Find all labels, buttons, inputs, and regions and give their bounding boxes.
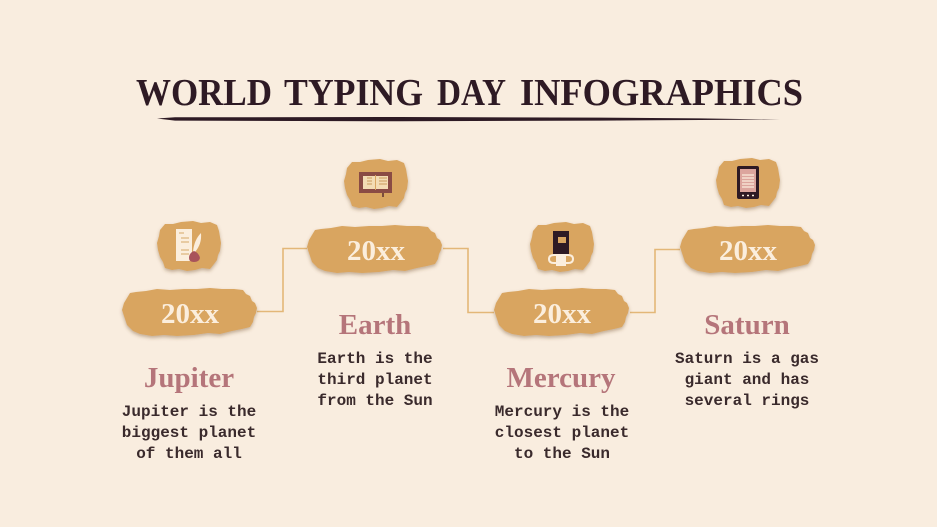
panel: Mercury	[494, 222, 629, 463]
icon: scroll, quill and inkwell	[157, 221, 221, 271]
year label: 20xx	[533, 298, 592, 330]
year label	[680, 225, 815, 273]
title: WORLD	[136, 72, 272, 114]
title: INFOGRAPHICS	[520, 72, 803, 114]
connector: Earth to Mercury	[443, 248, 494, 312]
year label	[307, 225, 442, 273]
description: Saturn is a gas	[675, 350, 819, 368]
description: biggest planet	[122, 424, 256, 442]
connector: Jupiter to Earth	[257, 248, 307, 312]
icon: open book in frame	[344, 159, 408, 209]
panel: Saturn	[675, 158, 819, 410]
year label: 20xx	[347, 235, 406, 267]
heading: Jupiter	[144, 362, 234, 394]
heading: Mercury	[507, 362, 616, 394]
panel: Earth	[307, 159, 442, 410]
year label	[494, 288, 629, 336]
description: Mercury is the	[495, 403, 629, 421]
year label: 20xx	[161, 298, 220, 330]
year label	[122, 288, 257, 336]
description: of them all	[136, 445, 242, 463]
icon: book on pedestal	[530, 222, 594, 272]
title	[136, 72, 803, 114]
title: TYPING	[284, 72, 423, 114]
year label: 20xx	[719, 235, 778, 267]
description: Earth is the	[317, 350, 433, 368]
description: from the Sun	[317, 392, 433, 410]
description: Jupiter is the	[122, 403, 256, 421]
heading: Saturn	[704, 309, 790, 341]
description: to the Sun	[514, 445, 610, 463]
description: third planet	[317, 371, 433, 389]
title underline brush stroke	[157, 117, 780, 121]
connector: Mercury to Saturn	[630, 250, 680, 312]
description: closest planet	[495, 424, 629, 442]
title: DAY	[437, 72, 506, 114]
description: several rings	[685, 392, 809, 410]
heading: Earth	[339, 309, 411, 341]
description: giant and has	[685, 371, 809, 389]
icon: e-reader tablet	[716, 158, 780, 208]
panel: Jupiter	[122, 221, 257, 463]
